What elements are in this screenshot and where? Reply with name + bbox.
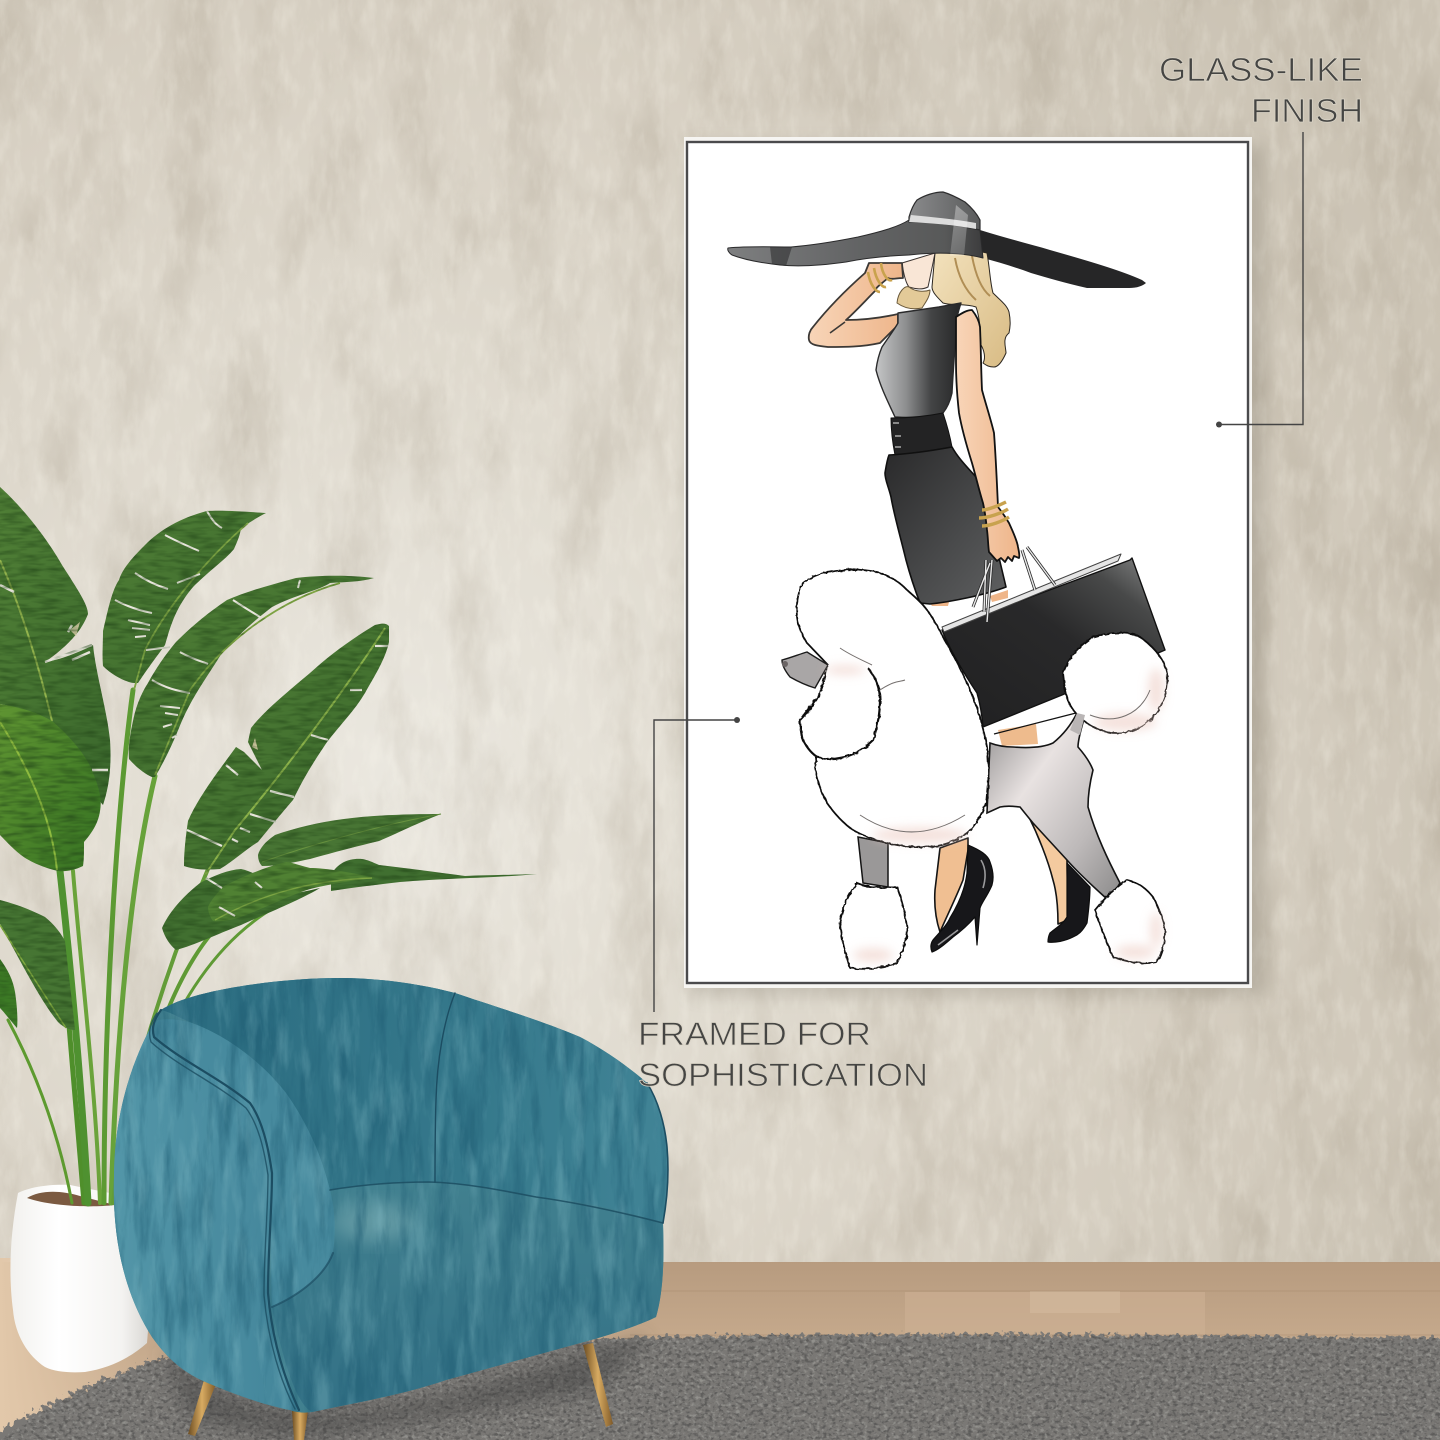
leaf: large right — [184, 624, 389, 875]
callout: glass-like finish — [1159, 51, 1363, 428]
plant stems — [8, 690, 300, 1203]
poodle front leg — [858, 837, 888, 887]
gold rings on raised arm — [868, 263, 892, 292]
chair floor shadow — [160, 1335, 650, 1440]
leaf: tip leaf upper right — [258, 814, 441, 866]
poodle ear outline — [800, 668, 880, 759]
plant pot — [10, 1185, 150, 1372]
callout label: FRAMED FOR — [638, 1016, 871, 1052]
raised arm — [809, 263, 903, 347]
woman's shoes — [931, 845, 1090, 952]
hat glass glare — [770, 247, 792, 266]
hat — [728, 192, 983, 266]
inner dark line and white canvas — [687, 142, 1248, 983]
chair seat — [272, 1182, 663, 1412]
leaf: lower left — [0, 900, 75, 1030]
leaf: bright front — [0, 704, 101, 871]
chair inner arm — [153, 1019, 335, 1307]
leaf: small lower — [162, 862, 375, 950]
lowered arm — [956, 310, 1019, 562]
poodle hind tail stem — [1070, 713, 1085, 735]
face and neck — [897, 253, 935, 309]
leaf: far left top — [0, 487, 111, 805]
poodle fur shadows — [825, 665, 1164, 962]
shoe highlights — [938, 860, 985, 945]
poodle ear — [800, 657, 880, 759]
chair outer arm — [114, 1010, 299, 1412]
poodle hind pompom — [1063, 633, 1167, 733]
illustration: poodle — [782, 570, 1167, 969]
hat back brim — [975, 230, 1146, 288]
chair back — [161, 978, 668, 1223]
callout label: GLASS-LIKE — [1159, 51, 1363, 88]
floor — [0, 1258, 1440, 1440]
framed artwork — [684, 137, 1265, 995]
illustration: woman — [728, 192, 1165, 952]
hair — [932, 251, 1010, 367]
poodle main coat — [797, 570, 988, 847]
chair seams — [150, 993, 668, 1410]
chair seat highlight — [333, 1202, 417, 1242]
leaf: tip leaf lower right — [331, 859, 537, 891]
rug — [0, 1330, 1440, 1440]
armchair — [100, 970, 680, 1440]
dress belt — [891, 413, 952, 455]
shopping bag — [942, 547, 1165, 734]
poodle snout — [782, 652, 828, 688]
callout: framed for sophistication: SOPHISTICATION — [638, 1057, 928, 1093]
chair legs — [188, 1343, 613, 1440]
dress bodice — [876, 303, 961, 418]
dress skirt — [885, 447, 1006, 604]
chair body — [114, 978, 668, 1413]
poodle fur strokes — [840, 648, 1150, 832]
callout leader line — [1219, 132, 1303, 424]
callout: framed for sophistication — [638, 717, 928, 1093]
poodle hind paw — [1095, 880, 1165, 963]
outer white frame — [684, 137, 1252, 988]
woman's legs — [926, 590, 1068, 932]
leaf: long middle — [129, 576, 374, 777]
callout leader line — [654, 720, 737, 1012]
leaf: centre top — [103, 511, 266, 690]
callout: glass-like finish: FINISH — [1251, 92, 1363, 129]
poodle grey body — [987, 713, 1120, 900]
poodle nose — [782, 661, 788, 667]
frame shadow — [690, 145, 1265, 995]
plant — [0, 487, 537, 1203]
poodle front paw — [840, 883, 907, 969]
velvet texture — [100, 970, 680, 1420]
